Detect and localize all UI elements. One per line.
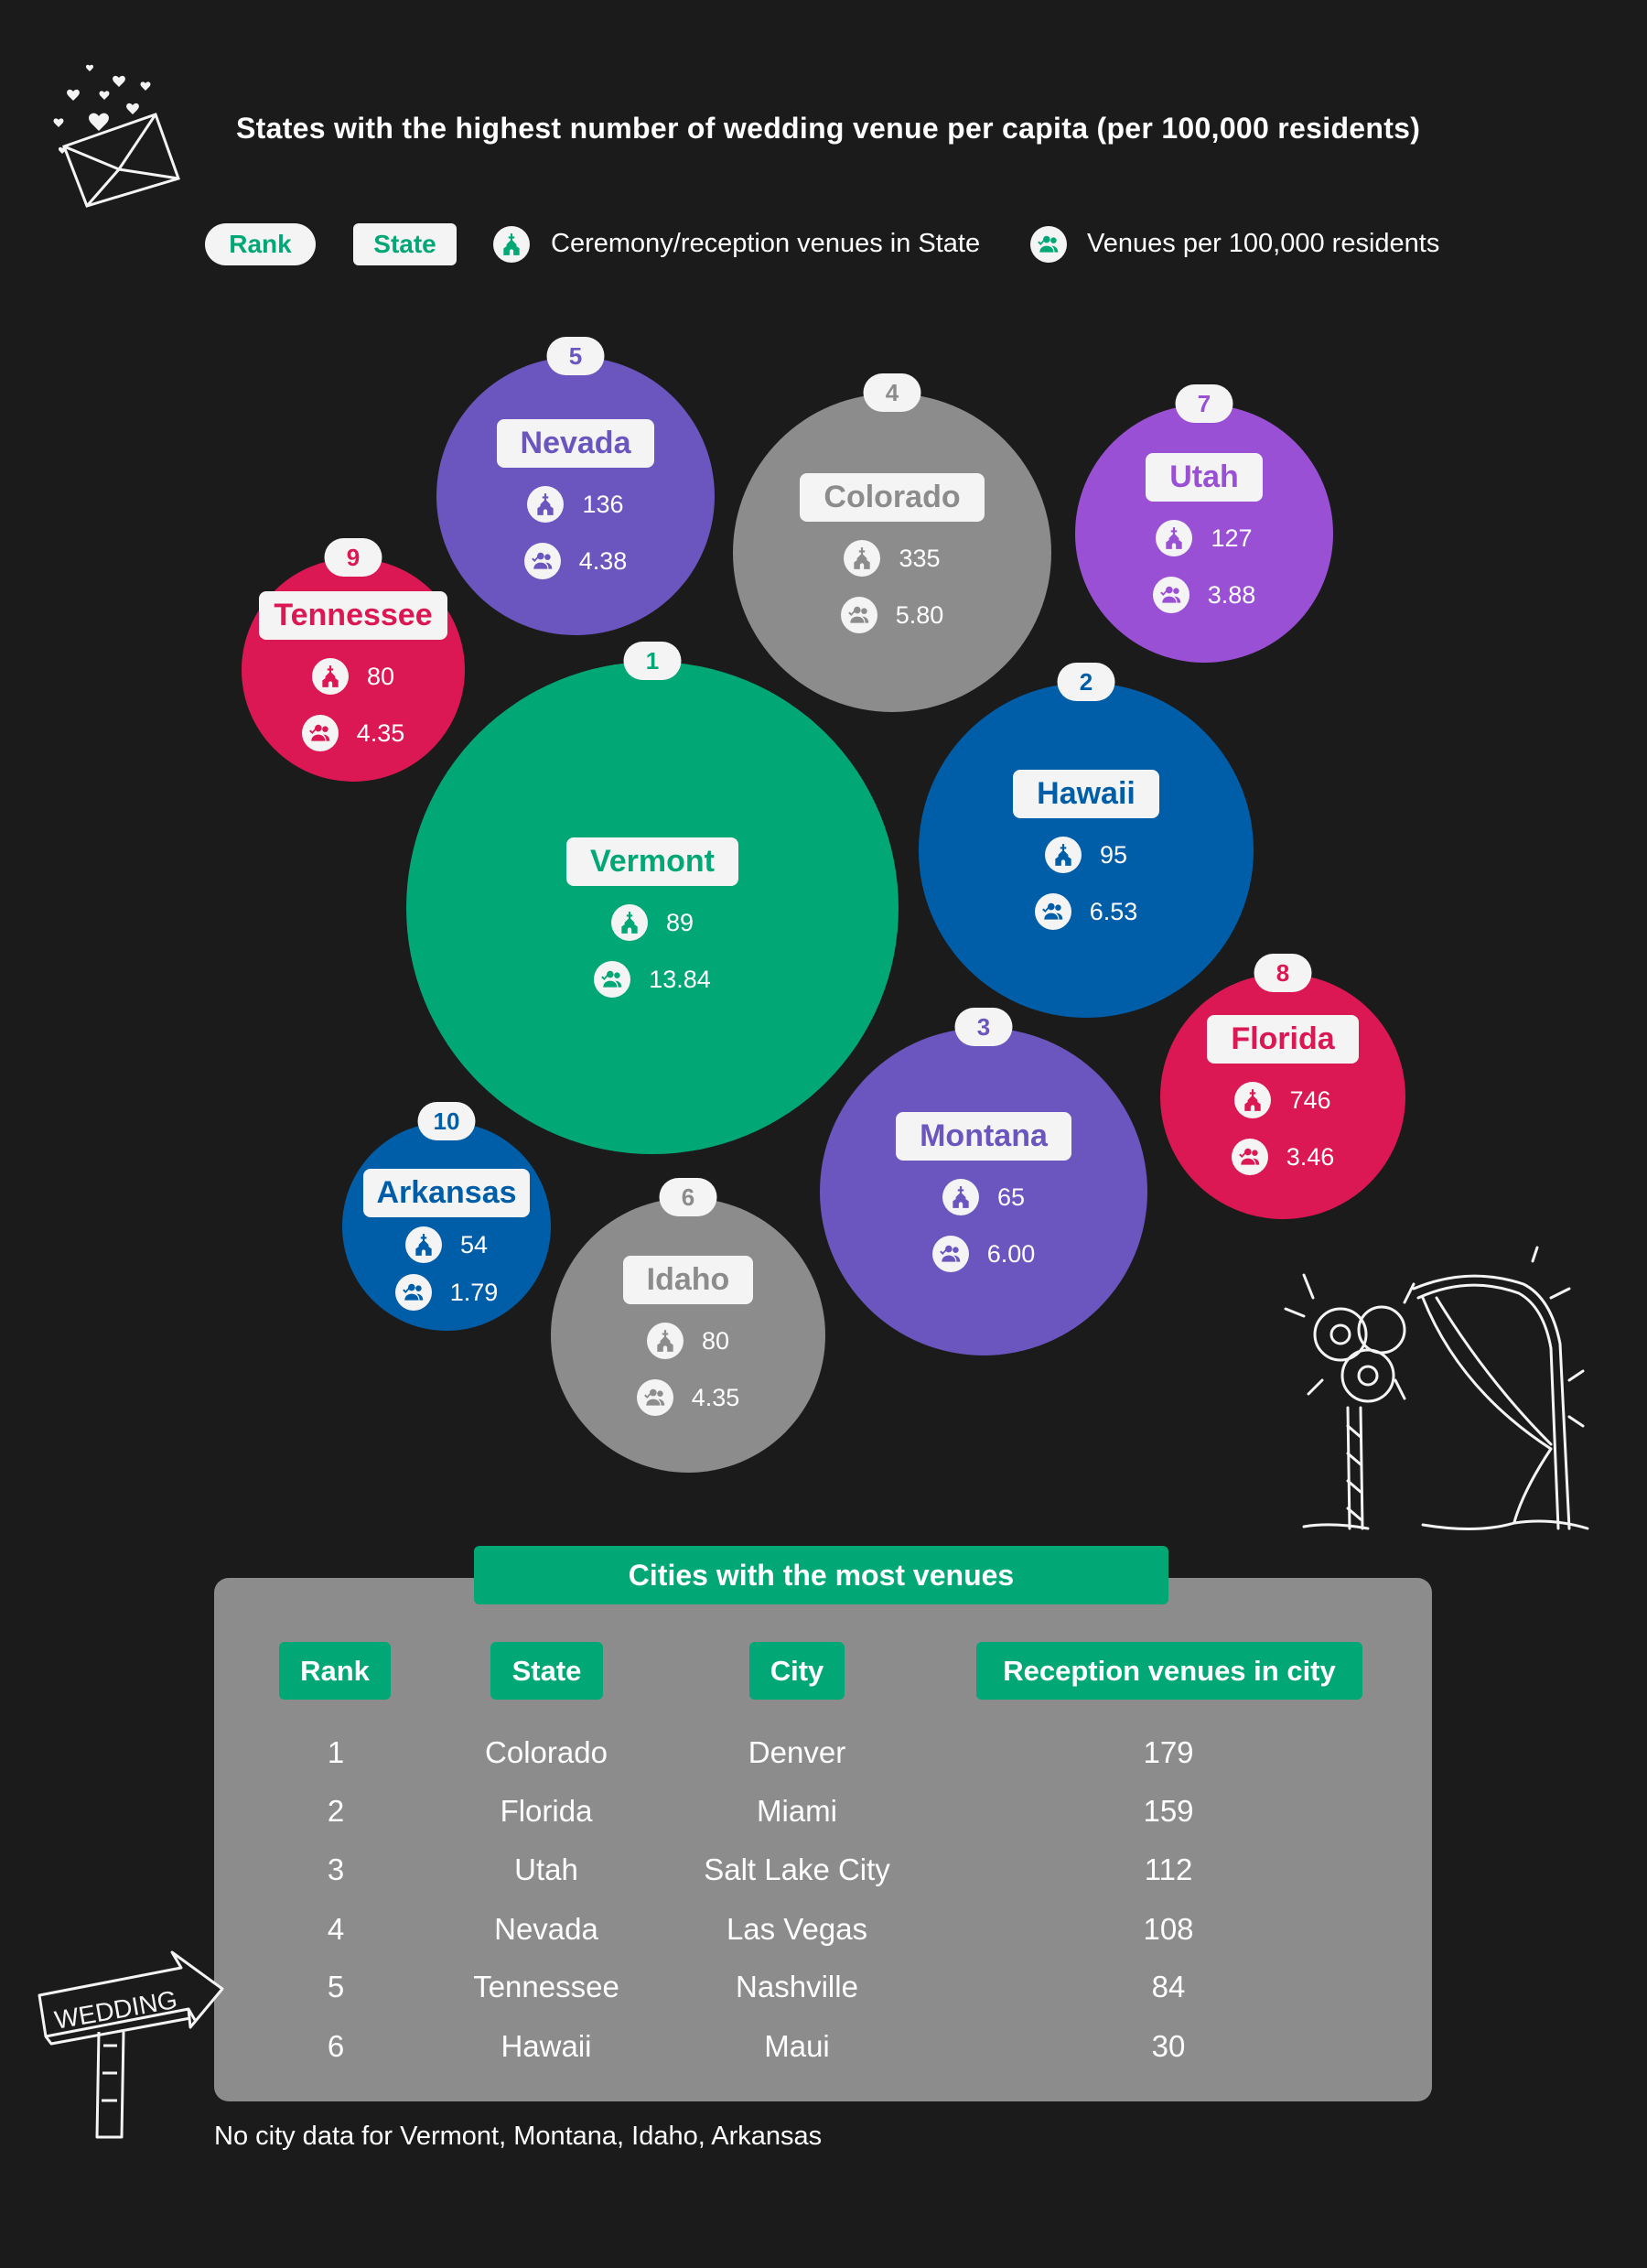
bubble: Nevada: 136 [582, 491, 624, 518]
table rows: Colorado [485, 1735, 608, 1769]
table rows: Las Vegas [727, 1912, 867, 1946]
text: 8 [1276, 959, 1289, 987]
bubble: Hawaii [919, 683, 1254, 1018]
title: States with the highest number of wedding venue per capita (per 100,000 residents) [236, 112, 1420, 145]
bubble: Montana: Montana [920, 1118, 1048, 1153]
bubble: Arkansas: Arkansas [376, 1175, 517, 1210]
bubble: Utah: 127 [1211, 524, 1253, 551]
column header: City [749, 1642, 845, 1700]
table rows: 179 [1143, 1735, 1194, 1769]
text: 4 [886, 379, 899, 406]
text: 1 [646, 646, 659, 674]
table rows: Florida [501, 1794, 592, 1828]
bubble: Arkansas [342, 1122, 551, 1331]
bubble: Montana: 6.00 [987, 1239, 1035, 1267]
table rows: 3 [328, 1852, 344, 1886]
bubble: Colorado: 335 [899, 544, 941, 571]
table rows: 84 [1152, 1970, 1185, 2003]
bubble: Utah [1075, 405, 1333, 663]
column header: Rank: Rank [300, 1655, 370, 1686]
bubble: Idaho: Idaho [647, 1262, 729, 1297]
text: 7 [1198, 390, 1211, 417]
text: 5 [569, 342, 582, 370]
bubble: Tennessee: 80 [367, 663, 394, 690]
icon: wedding arch [1285, 1247, 1588, 1530]
table header: Cities with the most venues [474, 1546, 1168, 1604]
bubble: Florida: 3.46 [1286, 1142, 1334, 1170]
bubble: Nevada [436, 357, 715, 635]
column header: Reception venues in city [976, 1642, 1362, 1700]
text: 2 [1080, 668, 1093, 696]
legend: Ceremony/reception venues in State [551, 229, 980, 258]
table header: Cities with the most venues: Cities with the most venues [629, 1558, 1014, 1591]
table rows: 5 [328, 1970, 344, 2003]
bubble: Vermont: 13.84 [649, 965, 711, 992]
column header: Reception venues in city: Reception venues in city [1003, 1655, 1336, 1686]
legend: state pill [353, 223, 457, 265]
bubble: Tennessee: 4.35 [357, 719, 404, 747]
bubble: Idaho [551, 1198, 825, 1473]
text: 10 [434, 1107, 459, 1135]
table rows: 159 [1143, 1794, 1194, 1828]
table rows: 30 [1152, 2029, 1185, 2063]
legend: venues icon [493, 226, 530, 263]
panel: cities table [214, 1578, 1432, 2101]
table rows: Denver [748, 1735, 845, 1769]
bubble: Idaho: 80 [702, 1327, 729, 1355]
bubble: Vermont: 89 [666, 908, 694, 935]
bubble: Colorado: Colorado [824, 480, 961, 514]
table rows: Maui [764, 2029, 830, 2063]
bubble: Arkansas: 54 [460, 1230, 488, 1258]
column header: State: State [512, 1655, 581, 1686]
table rows: Hawaii [501, 2029, 592, 2063]
legend [205, 223, 1439, 265]
text: 3 [977, 1012, 990, 1040]
bubble: Florida: Florida [1231, 1021, 1335, 1056]
footnote: No city data for Vermont, Montana, Idaho, Arkansas [214, 2122, 822, 2151]
table rows [328, 1735, 1194, 2063]
legend: Venues per 100,000 residents [1087, 229, 1439, 258]
bubble: Vermont [406, 662, 899, 1154]
icon: wedding signpost: WEDDING [52, 1985, 179, 2035]
bubble: Vermont: Vermont [590, 844, 715, 879]
bubble: Arkansas: 1.79 [450, 1278, 498, 1305]
table rows: Nashville [736, 1970, 858, 2003]
bubble: Colorado [733, 394, 1051, 712]
bubble: Utah: 3.88 [1208, 580, 1255, 608]
icon: wedding signpost [38, 1951, 223, 2138]
table rows: Salt Lake City [704, 1852, 890, 1886]
table rows: 4 [328, 1912, 344, 1946]
table rows: Miami [757, 1794, 837, 1828]
bubble: Hawaii: Hawaii [1037, 776, 1136, 811]
column header: Rank [279, 1642, 391, 1700]
table rows: 112 [1145, 1852, 1192, 1886]
bubble: Nevada: Nevada [521, 426, 630, 460]
bubble: Montana: 65 [997, 1183, 1025, 1210]
bubble: Hawaii: 95 [1100, 840, 1127, 868]
legend: per capita icon [1030, 226, 1067, 263]
legend: rank pill: Rank [229, 230, 292, 258]
bubble: Tennessee: Tennessee [274, 598, 433, 632]
table rows: 2 [328, 1794, 344, 1828]
bubble: Montana [820, 1028, 1147, 1355]
text: 6 [682, 1183, 694, 1210]
bubble: Colorado: 5.80 [896, 600, 943, 628]
icon: envelope with hearts [53, 64, 180, 208]
bubble: Florida [1160, 974, 1405, 1219]
legend: state pill: State [373, 230, 436, 258]
legend: rank pill [205, 223, 316, 265]
bubble: Utah: Utah [1169, 459, 1239, 494]
bubble: Tennessee [242, 558, 465, 782]
table rows: Tennessee [473, 1970, 619, 2003]
column header: City: City [770, 1655, 824, 1686]
table rows: Nevada [494, 1912, 598, 1946]
bubble: Hawaii: 6.53 [1090, 897, 1137, 924]
text: 9 [347, 544, 360, 571]
table rows: 108 [1143, 1912, 1194, 1946]
table rows: 1 [328, 1735, 344, 1769]
table rows: 6 [328, 2029, 344, 2063]
table rows: Utah [514, 1852, 578, 1886]
bubble: Idaho: 4.35 [692, 1384, 739, 1411]
column header: State [490, 1642, 603, 1700]
bubble: Florida: 746 [1289, 1085, 1331, 1113]
bubble: Nevada: 4.38 [579, 547, 627, 575]
